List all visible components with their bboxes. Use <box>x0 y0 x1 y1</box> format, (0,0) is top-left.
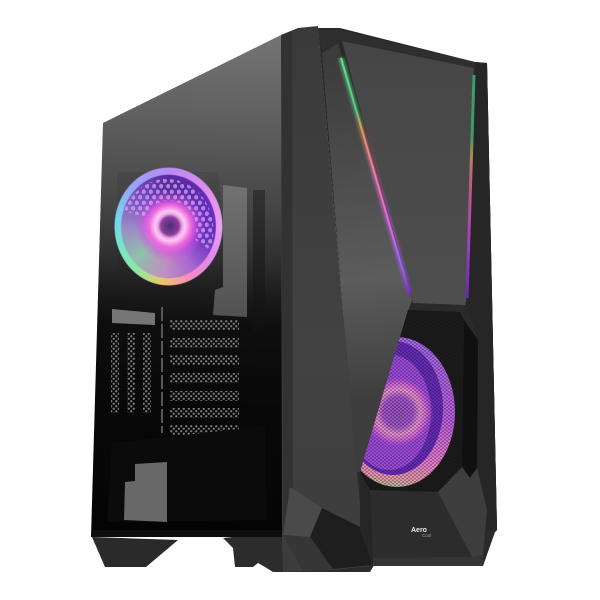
logo: Cool <box>422 533 431 538</box>
middle foot <box>223 530 380 572</box>
front fascia base <box>318 28 497 566</box>
lower front plate <box>370 490 472 558</box>
left foot <box>92 537 178 567</box>
right dark strip <box>462 320 478 478</box>
column dark facet <box>310 508 372 569</box>
cable rail <box>253 190 265 332</box>
fan hub glow <box>372 378 433 446</box>
horizontal vent rows <box>170 320 239 435</box>
logo <box>411 527 431 538</box>
fan hub glow <box>134 190 206 262</box>
fan disc <box>120 173 217 280</box>
top edge trim <box>318 29 475 68</box>
glass side panel <box>91 35 283 537</box>
glass bottom frame <box>91 530 283 537</box>
rainbow ring <box>114 167 223 286</box>
front mesh fan <box>360 310 464 492</box>
column lower facet <box>283 487 322 537</box>
left LED strip <box>341 58 410 295</box>
right trim panel <box>466 63 497 530</box>
vertical vent columns <box>111 333 151 413</box>
fan vent holes <box>124 179 214 248</box>
right LED strip <box>467 75 474 298</box>
power supply shroud <box>107 426 267 522</box>
expansion slot header <box>112 309 155 325</box>
motherboard bracket <box>213 185 247 317</box>
main front panel <box>342 41 474 305</box>
lower plate left facet <box>360 472 373 566</box>
fan blades <box>364 354 431 470</box>
mesh overlay <box>360 337 455 487</box>
fan inner disc <box>363 342 443 475</box>
right side rear panel <box>470 62 497 566</box>
rear fan mounting plate <box>117 172 226 290</box>
base trim <box>373 555 483 566</box>
lower plate right facet <box>438 467 487 557</box>
column edge shadow <box>281 31 293 537</box>
front column <box>281 26 370 572</box>
fan ring <box>360 337 455 487</box>
power supply block <box>124 462 167 522</box>
rear RGB fan <box>114 167 223 286</box>
column bottom facet <box>283 535 333 572</box>
left angled facet <box>322 43 412 472</box>
slot divider bar <box>161 307 163 433</box>
logo: Aero <box>411 527 427 534</box>
